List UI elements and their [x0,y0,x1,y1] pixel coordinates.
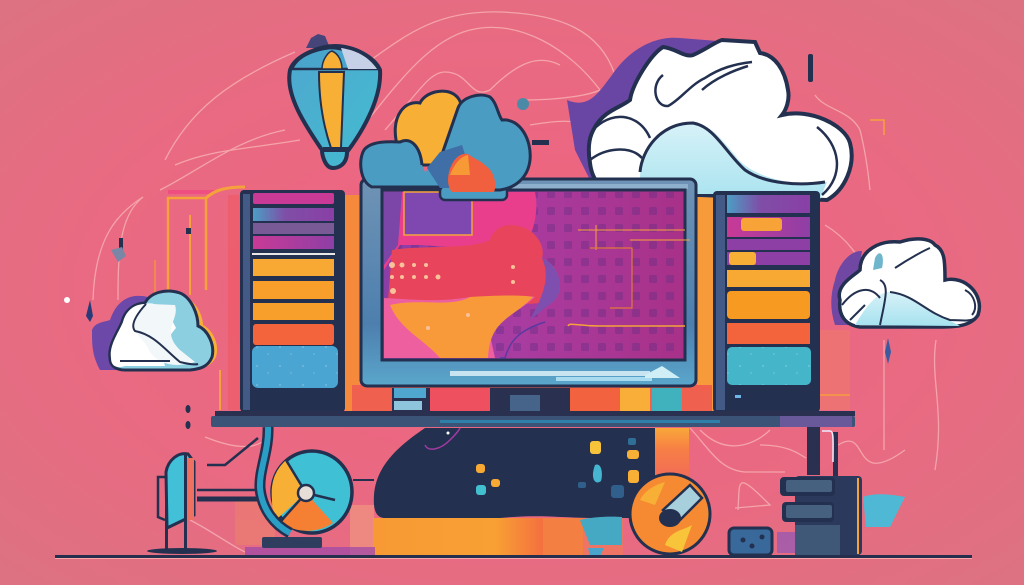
shelf [211,411,855,427]
left glow panel [228,195,240,410]
screen [382,190,690,360]
floor glow panels [235,428,689,556]
right orange wheel [630,474,710,554]
small decorative marks [64,54,905,527]
right tower server [713,191,820,412]
small white cloud, right [831,239,979,327]
small white cloud, left [92,291,217,370]
icon: large white cloud [567,38,852,204]
right stacked unit [780,427,862,555]
icon: hot air balloon [289,34,380,168]
monitor [361,179,696,386]
orange wiring left of server [155,187,850,410]
left fan wheel with stand [197,427,374,548]
circuit lines [93,12,939,552]
monitor status bar [450,371,650,376]
orange wall between servers [345,195,713,412]
icon: blue and orange cloud group [361,91,530,200]
right glow panel [820,330,850,410]
ground line [55,555,972,559]
small dark box [729,528,802,555]
small blue device [580,517,622,556]
left small monitor stand [147,454,217,554]
dark keyboard base [374,428,655,518]
left tower server [240,190,345,412]
